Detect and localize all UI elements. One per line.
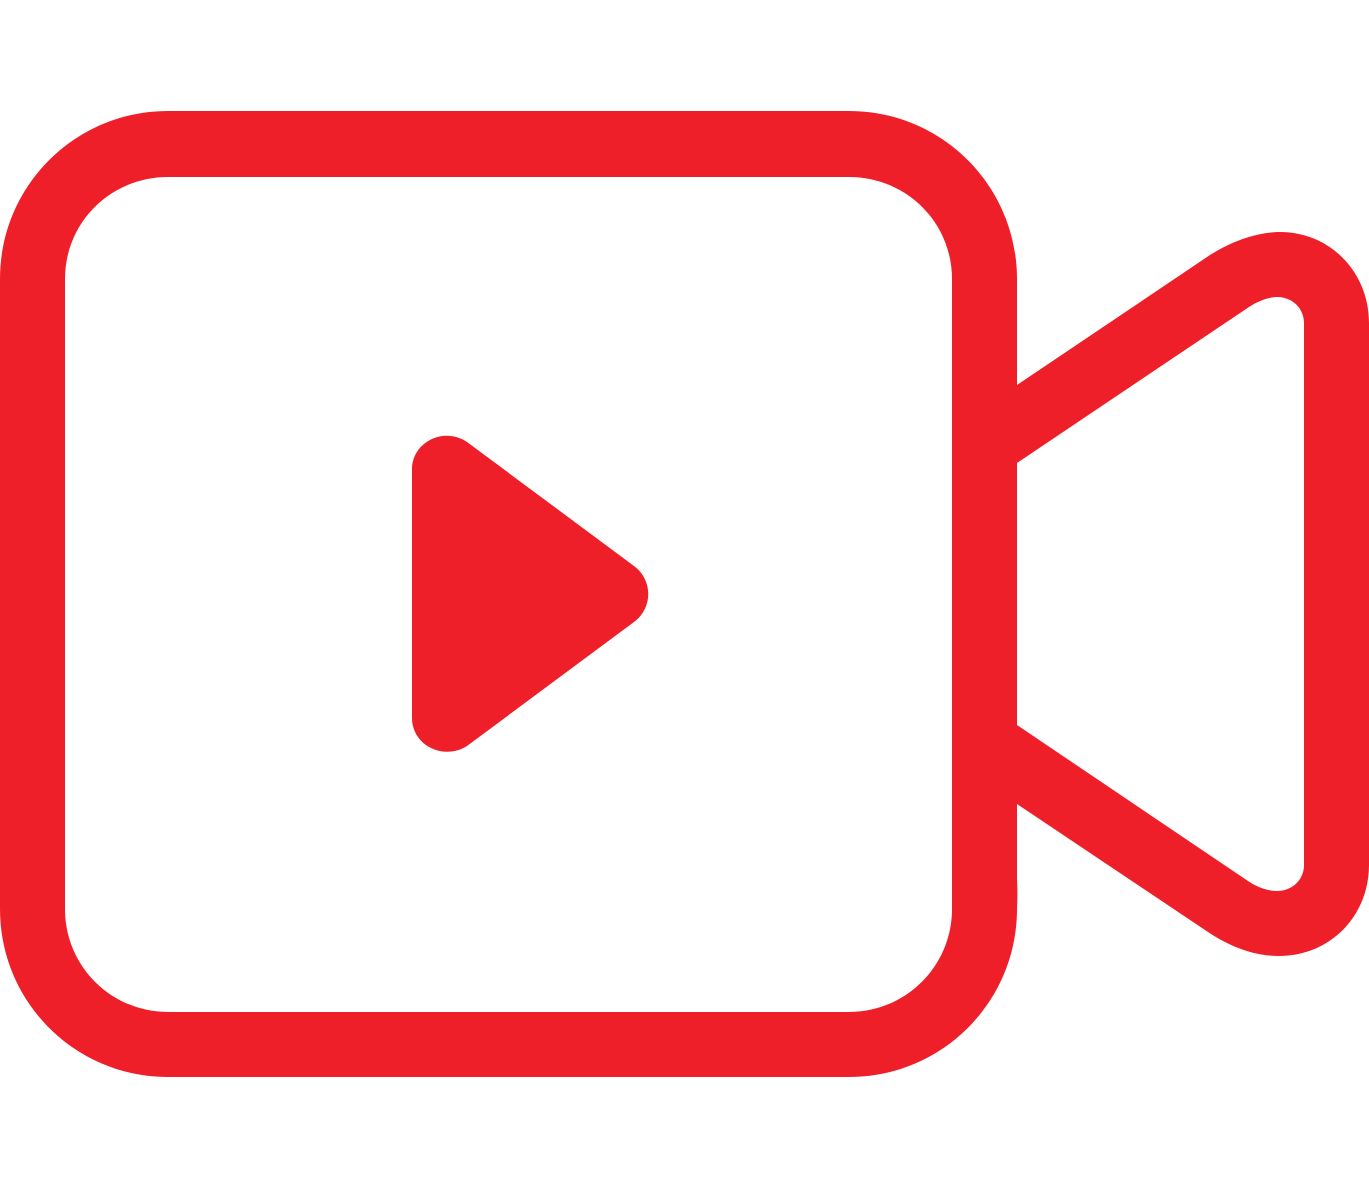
camera lens — [1017, 232, 1369, 956]
camera body — [0, 111, 1017, 1077]
play button — [412, 436, 648, 752]
